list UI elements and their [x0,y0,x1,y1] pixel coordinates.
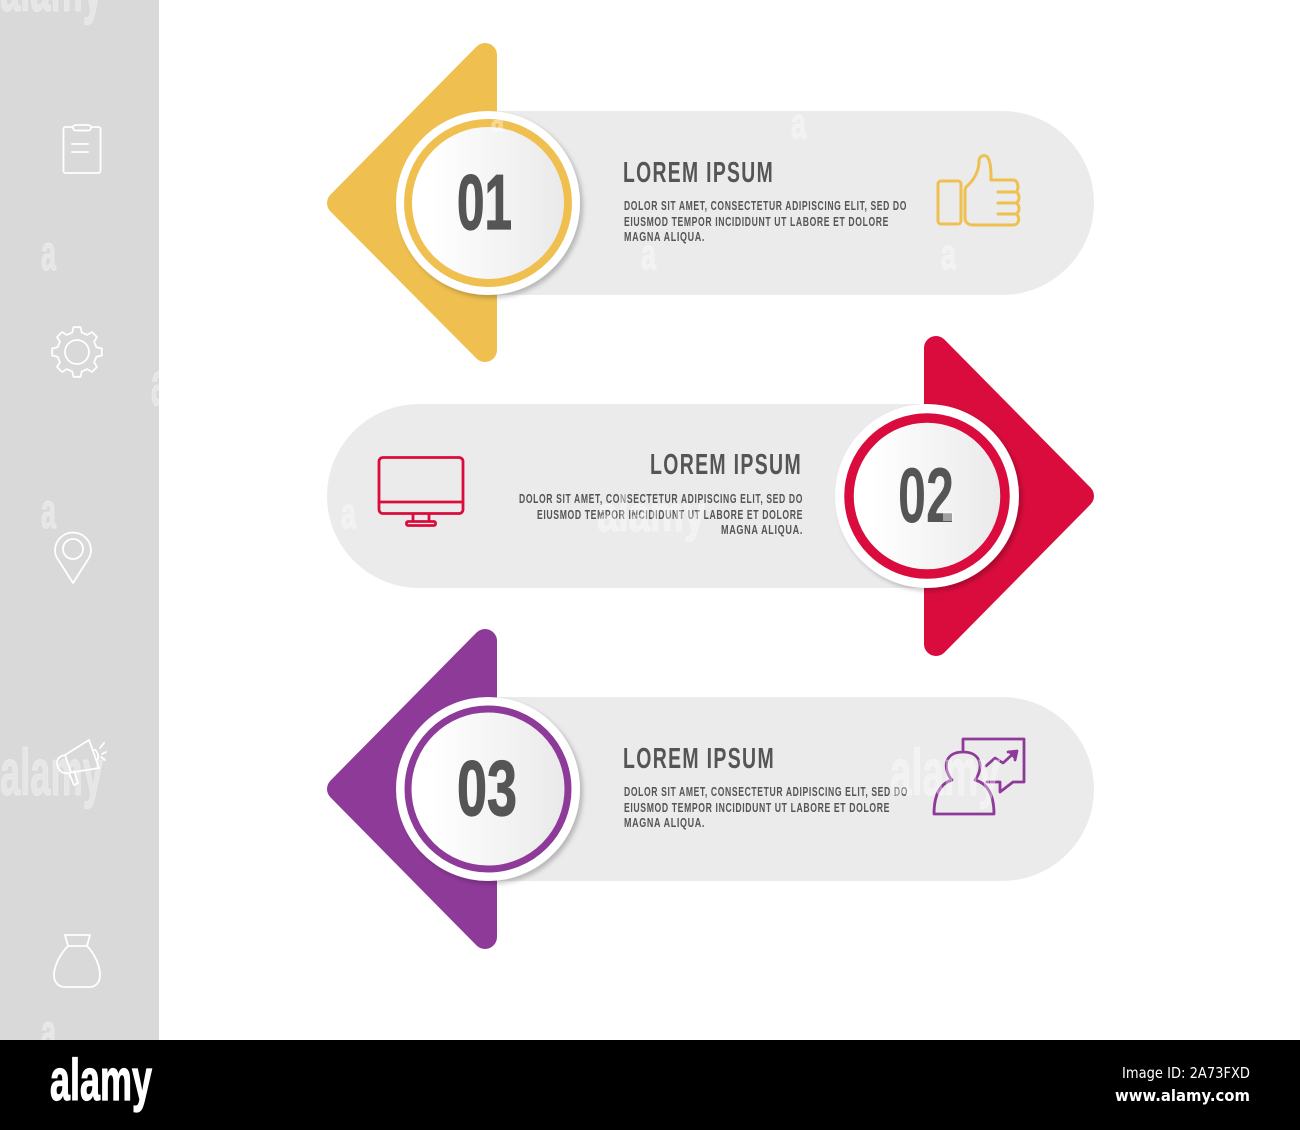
icon: gear [52,327,102,377]
icon: megaphone [57,740,106,785]
text block 02: MAGNA ALIQUA. [721,523,803,537]
website: www.alamy.com [1115,1086,1250,1105]
watermark marks: a [941,230,956,279]
image id: Image ID: 2A73FXD [1122,1064,1250,1082]
arrow 02 [936,348,1082,644]
number badge 01 [396,111,580,295]
text block 03 [624,785,908,830]
icon: thumbs up [938,156,1019,225]
arrow 03 [339,641,485,937]
text block 03: EIUSMOD TEMPOR INCIDIDUNT UT LABORE ET DOLORE [624,801,890,815]
logo wordmark: alamy [50,1048,152,1113]
watermark marks: a [41,1004,57,1060]
bar 01 [480,111,1094,295]
watermark marks: a [341,489,356,538]
sidebar panel [0,0,159,1040]
icon: monitor [379,458,463,526]
text block 02 [519,492,803,537]
text block 01 [624,199,907,244]
watermark marks: alamy [597,486,705,542]
footer bar [0,1040,1300,1130]
text block 01: MAGNA ALIQUA. [624,230,705,244]
watermark marks: a [641,230,656,279]
number badge 03 [396,697,580,881]
number badge 02: 02 [898,451,954,539]
bar 02 [327,404,945,588]
panel: step 01 [339,55,1094,350]
heading 02: LOREM IPSUM [650,449,802,481]
heading 01: LOREM IPSUM [623,157,774,189]
icon: clipboard [64,125,100,173]
icon: presenter with chart [934,739,1024,814]
watermark marks: a [41,483,57,539]
watermark marks: a [41,225,57,281]
arrow 01 [339,55,485,350]
number badge 01: 01 [457,158,512,246]
watermark marks: alamy [0,735,103,809]
watermark marks: alamy [890,735,1000,809]
watermark marks [0,0,1000,1060]
text block 01: DOLOR SIT AMET, CONSECTETUR ADIPISCING ELIT, SED DO [624,199,907,213]
number badge 02 [835,404,1019,588]
panel: step 03 [339,641,1094,937]
watermark marks: a [151,350,167,419]
text block 02: DOLOR SIT AMET, CONSECTETUR ADIPISCING ELIT, SED DO [519,492,803,506]
bar 03 [480,697,1094,881]
heading 03: LOREM IPSUM [623,743,775,775]
panel: step 02 [327,348,1082,644]
number badge 03: 03 [457,744,517,832]
watermark marks: a [791,99,806,148]
text block 01: EIUSMOD TEMPOR INCIDIDUNT UT LABORE ET DOLORE [624,215,889,229]
text block 03: MAGNA ALIQUA. [624,816,705,830]
icon: sack [54,935,100,987]
watermark marks: a [491,99,505,140]
text block 03: DOLOR SIT AMET, CONSECTETUR ADIPISCING ELIT, SED DO [624,785,908,799]
text block 02: EIUSMOD TEMPOR INCIDIDUNT UT LABORE ET DOLORE [537,508,803,522]
icon: map pin [55,532,91,583]
